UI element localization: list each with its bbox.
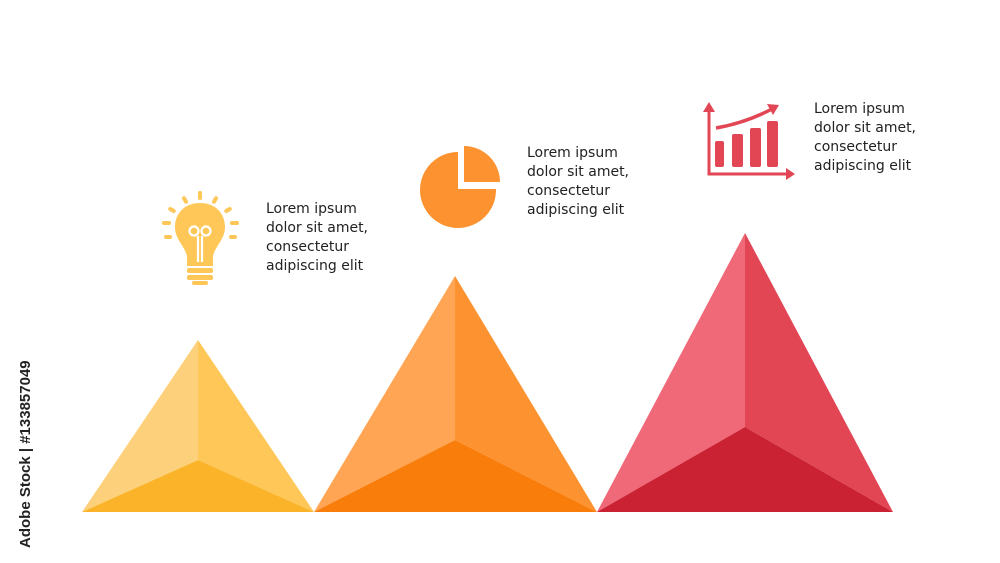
text block 2: dolor sit amet, xyxy=(527,164,629,180)
text block 1: consectetur xyxy=(266,239,349,255)
text block 3: dolor sit amet, xyxy=(814,120,916,136)
text block 1: adipiscing elit xyxy=(266,258,364,274)
icon: light bulb xyxy=(162,191,239,285)
text block 3: adipiscing elit xyxy=(814,158,912,174)
text block 1: dolor sit amet, xyxy=(266,220,368,236)
pyramid: yellow xyxy=(82,340,314,512)
text block 2: Lorem ipsum xyxy=(527,145,618,161)
text block 3: consectetur xyxy=(814,139,897,155)
pyramid: orange xyxy=(314,276,597,512)
side watermark id: Adobe Stock | #133857049 xyxy=(17,360,34,548)
text block 2: consectetur xyxy=(527,183,610,199)
text block 3: Lorem ipsum xyxy=(814,101,905,117)
icon: bar chart xyxy=(703,102,795,180)
icon: pie chart xyxy=(420,146,500,228)
pyramid: red xyxy=(597,233,893,512)
text block 1: Lorem ipsum xyxy=(266,201,357,217)
text block 2: adipiscing elit xyxy=(527,202,625,218)
